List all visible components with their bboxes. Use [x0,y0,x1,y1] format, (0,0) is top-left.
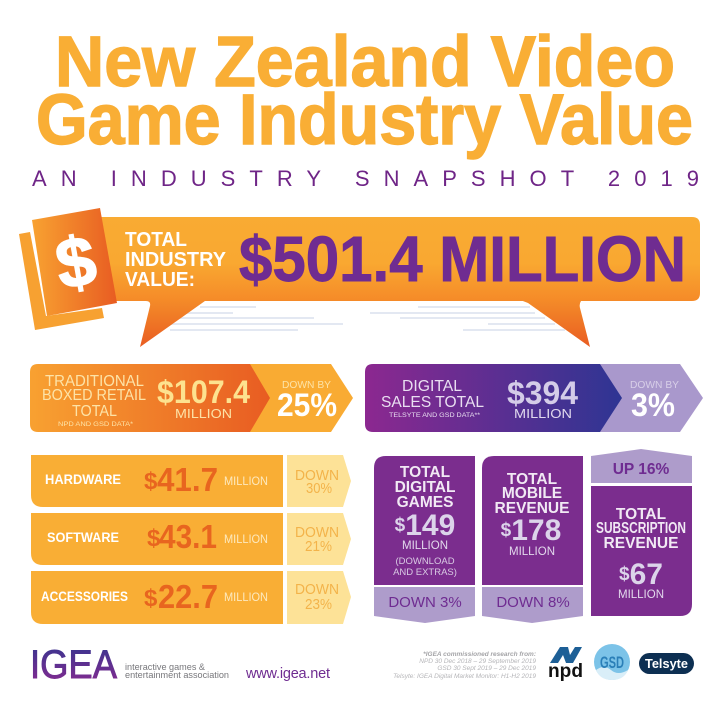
panel: hardware row: HARDWARE [45,472,121,487]
panel: digital sales [365,364,703,432]
panel: digital sales: MILLION [514,406,572,421]
panel: accessories row: $ [144,585,158,612]
panel: hardware row [31,455,351,507]
retail label: NPD AND GSD DATA* [58,421,134,428]
panel: total subscription revenue: TOTAL [616,506,666,523]
title: New Zealand Video [55,23,675,102]
association name: interactive games & [125,662,206,673]
retail label: TOTAL [72,403,117,420]
banner label [125,229,227,291]
digital label: TELSYTE AND GSD DATA** [389,412,481,419]
panel: traditional boxed retail [30,364,353,432]
retail value: $107.4 [157,374,250,410]
panel: total subscription revenue: $ [619,564,630,585]
banner value: $501.4 MILLION [239,223,686,295]
footnote: NPD 30 Dec 2018 – 29 September 2019 [419,658,536,665]
footnote: Telsyte: IGEA Digital Market Monitor: H1-H2 2019 [393,673,536,680]
banner label: VALUE: [125,269,195,291]
retail label [42,373,146,428]
subtitle: AN INDUSTRY SNAPSHOT 2019 [32,166,699,191]
panel: total subscription revenue: UP 16% [613,461,670,478]
panel: traditional boxed retail: 25% [277,387,337,423]
logo: npd [548,647,583,682]
panel: accessories row: 22.7 [158,578,218,615]
logo: Telsyte [639,653,694,674]
panel: software row: 21% [305,539,332,555]
digital label [381,378,484,419]
panel: software row [31,513,351,565]
banner body [100,217,700,301]
banner tail [140,296,590,347]
digital change: DOWN BY [630,379,679,391]
panel: software row: $ [147,525,161,552]
panel: software row: MILLION [224,532,268,546]
panel: software row: 43.1 [159,518,217,555]
logo: Telsyte: Telsyte [645,657,688,671]
footnote: *IGEA commissioned research from: [423,651,536,658]
logo: npd: npd [548,661,583,682]
retail label: TRADITIONAL [45,373,144,390]
panel: total mobile revenue: 178 [511,514,561,547]
panel: total mobile revenue: MOBILE [502,485,562,502]
panel: total mobile revenue: $ [501,520,512,541]
panel: traditional boxed retail: MILLION [175,406,232,421]
panel: total digital games: DOWN 3% [388,594,462,611]
retail change: DOWN BY [282,379,331,391]
panel: hardware row: $ [144,468,158,495]
panel: total subscription revenue: MILLION [618,589,664,601]
panel: total digital games: MILLION [402,540,448,552]
panel: accessories row: MILLION [224,590,268,604]
panel: total subscription revenue: REVENUE [604,535,678,552]
panel: total mobile revenue: MILLION [509,546,555,558]
logo: GSD: GSD [600,653,624,672]
panel: total digital games: TOTAL [400,464,450,481]
retail label: BOXED RETAIL [42,387,146,404]
logo: GSD [594,644,630,680]
panel: software row: DOWN [295,525,339,541]
panel: total mobile revenue: DOWN 8% [496,594,570,611]
panel: total subscription revenue [591,449,692,616]
panel: hardware row: 30% [306,481,332,497]
footnote: GSD 30 Sept 2019 – 29 Dec 2019 [437,665,536,672]
association name: entertainment association [125,670,229,681]
panel: total digital games: DIGITAL [395,479,455,496]
panel: accessories row: 23% [305,597,332,613]
panel: total mobile revenue [482,456,583,623]
icon: dollar book [19,208,117,330]
panel: total industry value banner [19,208,700,347]
association name [125,662,229,681]
panel: total digital games [374,456,475,623]
panel: hardware row: DOWN [295,468,339,484]
panel: total digital games: 149 [405,509,455,542]
banner label: TOTAL [125,229,187,251]
panel: accessories row: DOWN [295,582,339,598]
panel: accessories row [31,571,351,624]
footnote [393,651,536,680]
digital label: SALES TOTAL [381,394,484,411]
title: Game Industry Value [36,81,693,160]
panel: total digital games: GAMES [397,494,453,511]
title [36,23,693,160]
panel: hardware row: MILLION [224,474,268,488]
panel: total mobile revenue: TOTAL [507,471,557,488]
panel: total subscription revenue: SUBSCRIPTION [596,520,686,537]
panel: total digital games: AND EXTRAS) [393,567,457,578]
panel: digital sales: 3% [631,387,675,423]
panel: total mobile revenue: REVENUE [495,500,569,517]
icon: dollar book: $ [50,221,102,304]
logo: IGEA: IGEA [30,643,117,687]
digital value: $394 [507,375,578,411]
panel: accessories row: ACCESSORIES [41,589,128,604]
panel: total subscription revenue: 67 [630,558,663,591]
panel: total digital games: $ [395,515,406,536]
website: www.igea.net [245,666,330,682]
panel: total digital games: (DOWNLOAD [395,556,455,567]
panel: hardware row: 41.7 [157,461,218,498]
panel: software row: SOFTWARE [47,530,119,545]
digital label: DIGITAL [402,378,462,395]
banner label: INDUSTRY [125,249,227,271]
